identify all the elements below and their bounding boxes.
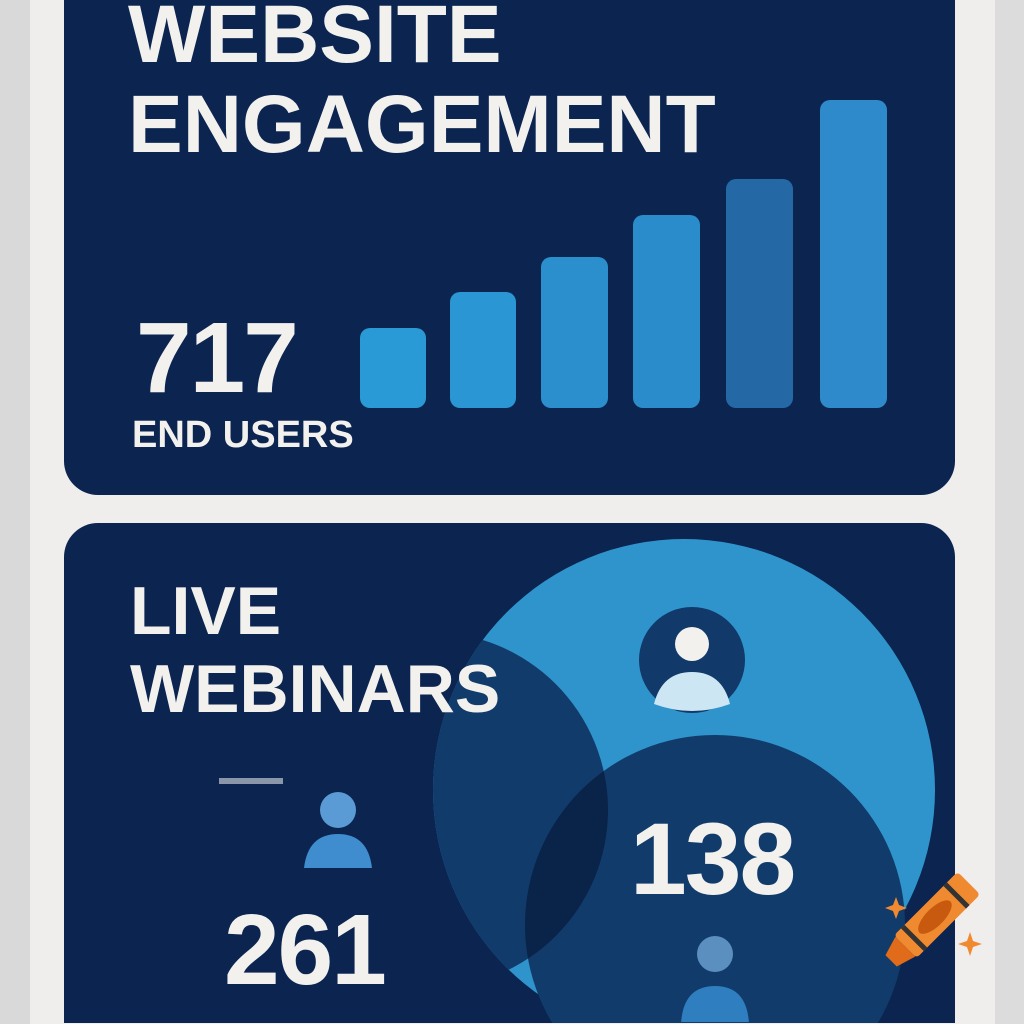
venn circles [433, 539, 935, 1023]
icon: person bottom [681, 936, 749, 1022]
title: live webinars: WEBINARS [130, 651, 500, 727]
bar chart [360, 100, 887, 408]
icon: crayon [885, 874, 982, 966]
stat: 717 end users [132, 302, 354, 456]
right backdrop strip [995, 0, 1024, 1024]
icon: person left [304, 792, 372, 868]
stat: 138: 138 [630, 802, 794, 916]
title: website engagement: ENGAGEMENT [128, 79, 716, 170]
left backdrop strip [0, 0, 30, 1024]
icon: person top [639, 607, 745, 713]
title: website engagement [128, 0, 716, 170]
stat: 717 end users: 717 [136, 302, 297, 414]
panel: website engagement [64, 0, 955, 495]
stat: 261: 261 [224, 894, 385, 1006]
stat: 717 end users: END USERS [132, 414, 354, 456]
title: live webinars [130, 573, 500, 727]
panel: live webinars [64, 523, 955, 1023]
dash [219, 778, 283, 784]
title: live webinars: LIVE [130, 573, 281, 649]
